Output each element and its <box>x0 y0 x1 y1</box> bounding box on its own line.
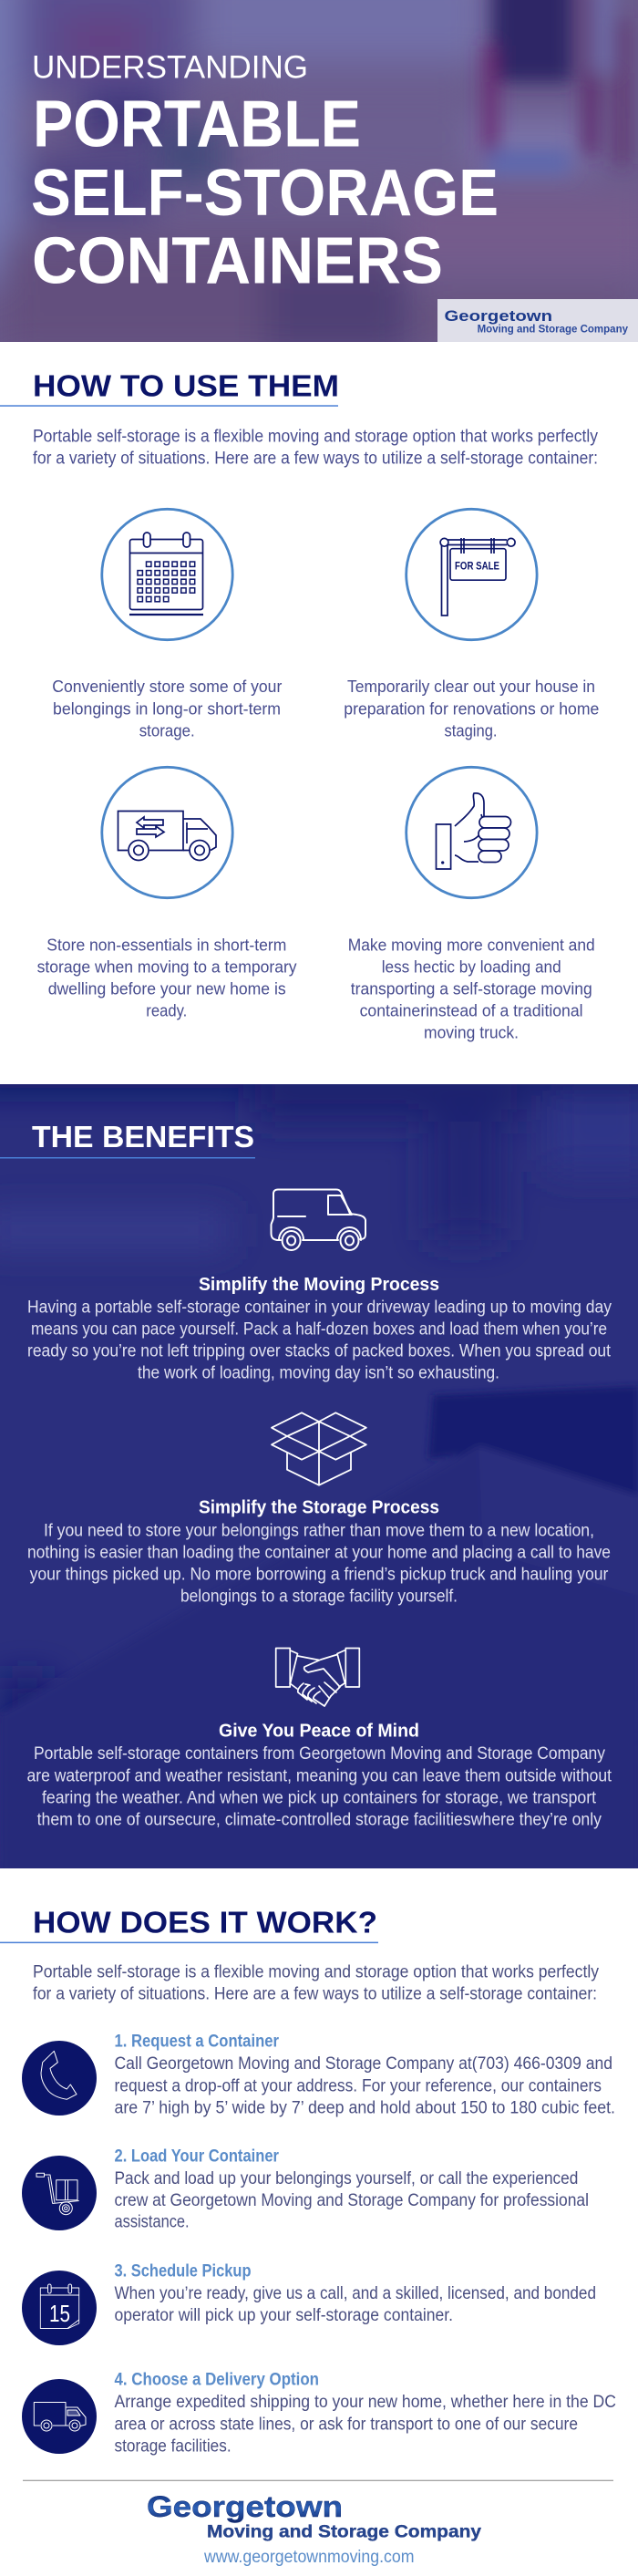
text: short-term storage: Store non-essentials in short-term <box>46 936 286 954</box>
text: introduction: Portable self-storage is a flexible moving and storage option that works perfectly <box>33 427 598 447</box>
text: moving convenience: Make moving more convenient and <box>348 936 595 954</box>
icon: calendar in circle <box>102 509 232 640</box>
section: how to use them <box>0 369 599 1041</box>
step 2 <box>115 2147 589 2232</box>
step 3: operator will pick up your self-storage container. <box>115 2306 453 2325</box>
heading: the benefits: THE BENEFITS <box>32 1121 254 1154</box>
text: simplify the storage process: belongings to a storage facility yourself. <box>180 1587 458 1607</box>
icon: hand truck <box>22 2156 97 2230</box>
heading: how to use them: HOW TO USE THEM <box>33 369 339 403</box>
step 4: storage facilities. <box>115 2436 232 2456</box>
heading: portable self-storage containers: CONTAINERS <box>32 225 443 298</box>
logo: header badge: Moving and Storage Company <box>478 325 629 336</box>
text: introduction: Portable self-storage is a flexible moving and storage option that works perfectly <box>33 1962 599 1982</box>
step 1 <box>115 2032 615 2117</box>
text: give you peace of mind: fearing the weather. And when we pick up containers for storage, we transport <box>42 1788 597 1807</box>
heading: portable self-storage containers: SELF-STORAGE <box>31 157 499 230</box>
text: give you peace of mind <box>27 1720 612 1829</box>
step 4: area or across state lines, or ask for transport to one of our secure <box>115 2415 578 2434</box>
step 4 <box>115 2370 616 2456</box>
text: moving convenience <box>348 936 595 1041</box>
icon: thumbs up in circle <box>406 767 537 898</box>
text: introduction <box>33 1962 599 2004</box>
text: store belongings: Conveniently store some of your <box>52 677 282 696</box>
text: moving convenience: transporting a self-storage moving <box>351 979 592 998</box>
logo: footer: Georgetown <box>147 2490 343 2523</box>
logo: header badge: Georgetown <box>445 307 552 325</box>
text: short-term storage: dwelling before your new home is <box>48 979 286 998</box>
step 2: Pack and load up your belongings yourself, or call the experienced <box>115 2169 578 2188</box>
icon: van <box>272 1189 365 1250</box>
text: store belongings: belongings in long-or short-term <box>53 698 281 718</box>
text: simplify the moving process: Simplify the Moving Process <box>199 1274 439 1295</box>
icon: for sale sign in circle: FOR SALE <box>455 562 499 573</box>
text: simplify the storage process: Simplify the Storage Process <box>199 1496 439 1517</box>
text: moving convenience: containerinstead of a traditional <box>360 1001 583 1019</box>
text: simplify the storage process: If you need to store your belongings rather than move them to a new location, <box>44 1521 594 1540</box>
step 2: crew at Georgetown Moving and Storage Company for professional <box>115 2191 589 2210</box>
text: give you peace of mind: them to one of oursecure, climate-controlled storage facilitieswhere they’re only <box>37 1810 602 1829</box>
text: simplify the storage process: your things picked up. No more borrowing a friend’s pickup truck and hauling your <box>30 1565 609 1584</box>
text: website: www.georgetownmoving.com <box>203 2548 414 2567</box>
text: store belongings <box>52 677 282 740</box>
text: moving convenience: moving truck. <box>424 1022 519 1041</box>
logo: footer <box>147 2490 481 2541</box>
text: give you peace of mind: Portable self-storage containers from Georgetown Moving and Storage Company <box>34 1744 605 1764</box>
step 1: 1. Request a Container <box>115 2032 279 2052</box>
text: simplify the storage process <box>27 1496 611 1607</box>
icon: delivery truck <box>22 2379 97 2454</box>
text: clear out house: Temporarily clear out your house in <box>347 677 595 696</box>
section: how does it work <box>0 1906 616 2567</box>
text: simplify the moving process: the work of loading, moving day isn’t so exhausting. <box>138 1363 499 1382</box>
text: introduction <box>33 427 598 469</box>
icon: phone <box>22 2041 97 2116</box>
text: moving convenience: less hectic by loading and <box>382 957 561 976</box>
step 2: assistance. <box>115 2213 190 2232</box>
step 1: are 7’ high by 5’ wide by 7’ deep and hold about 150 to 180 cubic feet. <box>115 2098 615 2117</box>
step 1: Call Georgetown Moving and Storage Company at(703) 466-0309 and <box>115 2054 612 2074</box>
step 2: 2. Load Your Container <box>115 2147 279 2167</box>
panel: the benefits <box>0 1058 638 1878</box>
text: store belongings: storage. <box>139 720 195 740</box>
icon: handshake <box>276 1649 359 1706</box>
heading: portable self-storage containers <box>31 88 499 298</box>
text: simplify the moving process <box>27 1274 612 1382</box>
step 3: When you’re ready, give us a call, and a skilled, licensed, and bonded <box>115 2284 596 2303</box>
text: short-term storage: storage when moving to a temporary <box>37 957 297 976</box>
logo: header badge <box>437 299 638 342</box>
text: clear out house: preparation for renovations or home <box>344 698 599 718</box>
icon: moving truck in circle <box>102 767 232 898</box>
text: clear out house: staging. <box>445 720 498 740</box>
step 3 <box>115 2261 596 2325</box>
text: introduction: for a variety of situations. Here are a few ways to utilize a self-storage container: <box>33 1984 597 2004</box>
text: introduction: for a variety of situations. Here are a few ways to utilize a self-storage container: <box>33 449 598 469</box>
text: short-term storage <box>37 936 297 1019</box>
panel: hero header <box>0 0 638 356</box>
icon: for sale sign in circle <box>406 509 537 640</box>
heading: how does it work: HOW DOES IT WORK? <box>33 1906 377 1940</box>
step 3: 3. Schedule Pickup <box>115 2261 252 2281</box>
text: clear out house <box>344 677 599 740</box>
icon: calendar 15: 15 <box>49 2300 70 2327</box>
icon: open box <box>272 1412 366 1485</box>
icon: calendar 15 <box>22 2271 97 2345</box>
text: short-term storage: ready. <box>146 1001 187 1019</box>
text: give you peace of mind: Give You Peace of Mind <box>219 1720 419 1741</box>
text: understanding: UNDERSTANDING <box>32 50 308 86</box>
step 1: request a drop-off at your address. For your reference, our containers <box>115 2076 602 2095</box>
step 4: 4. Choose a Delivery Option <box>115 2370 319 2390</box>
logo: footer: Moving and Storage Company <box>207 2521 481 2541</box>
heading: portable self-storage containers: PORTABLE <box>33 88 361 161</box>
